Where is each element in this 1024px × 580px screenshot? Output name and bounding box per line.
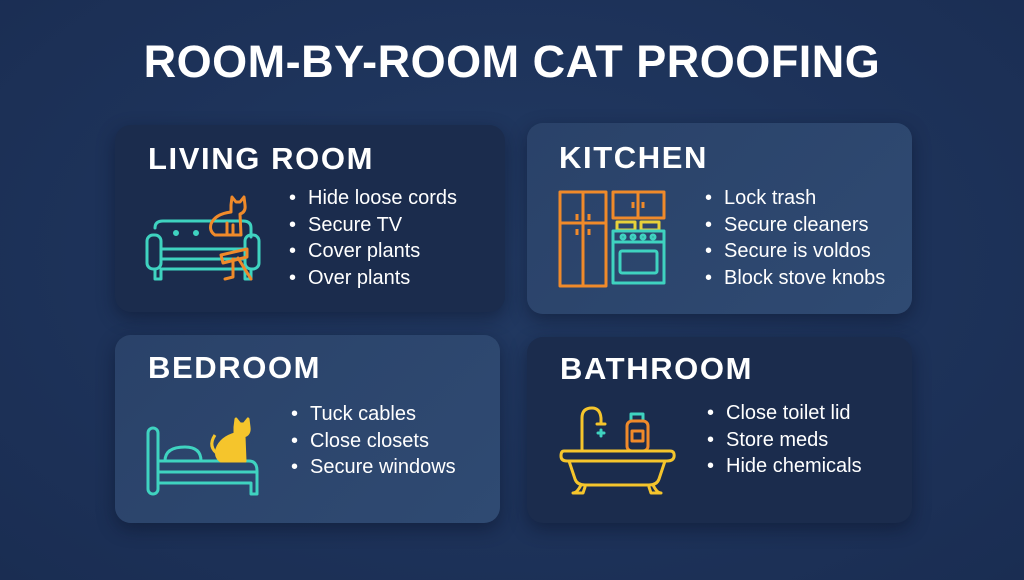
heading: bedroom: BEDROOM [148, 350, 321, 385]
bullets: bathroom: Close toilet lid [726, 402, 851, 424]
bullets: bathroom: Hide chemicals [726, 455, 862, 477]
panel: bedroom [115, 335, 500, 523]
bullets: kitchen: Block stove knobs [724, 266, 885, 288]
bullets: bedroom: Tuck cables [310, 403, 416, 425]
heading: bathroom: BATHROOM [560, 351, 753, 386]
icon: sofa with cat [146, 195, 260, 281]
bullets: kitchen: Secure is voldos [724, 240, 871, 262]
bullets: bedroom: Close closets [310, 430, 429, 452]
bullets: living room: Over plants [308, 266, 410, 288]
bullets: living room: Cover plants [308, 240, 420, 262]
bullets: bathroom: Store meds [726, 428, 828, 450]
panel: bathroom [527, 337, 912, 523]
icon: bed with cat [146, 417, 258, 496]
bullets: kitchen [706, 187, 885, 288]
bullets: kitchen: Lock trash [724, 187, 816, 209]
icon: bathtub [560, 406, 676, 494]
panel: kitchen [527, 123, 912, 314]
bullets: living room: Secure TV [308, 214, 402, 236]
title: ROOM-BY-ROOM CAT PROOFING [144, 36, 880, 87]
bullets: bedroom: Secure windows [310, 456, 456, 478]
heading: living room: LIVING ROOM [148, 141, 374, 176]
bullets: bathroom [708, 402, 862, 477]
bullets: bedroom [292, 403, 456, 478]
panel: living room [115, 125, 505, 312]
bullets: kitchen: Secure cleaners [724, 214, 869, 236]
icon: kitchen cabinets and stove [558, 190, 666, 288]
heading: kitchen: KITCHEN [559, 140, 708, 175]
bullets: living room [290, 187, 457, 288]
bullets: living room: Hide loose cords [308, 187, 457, 209]
